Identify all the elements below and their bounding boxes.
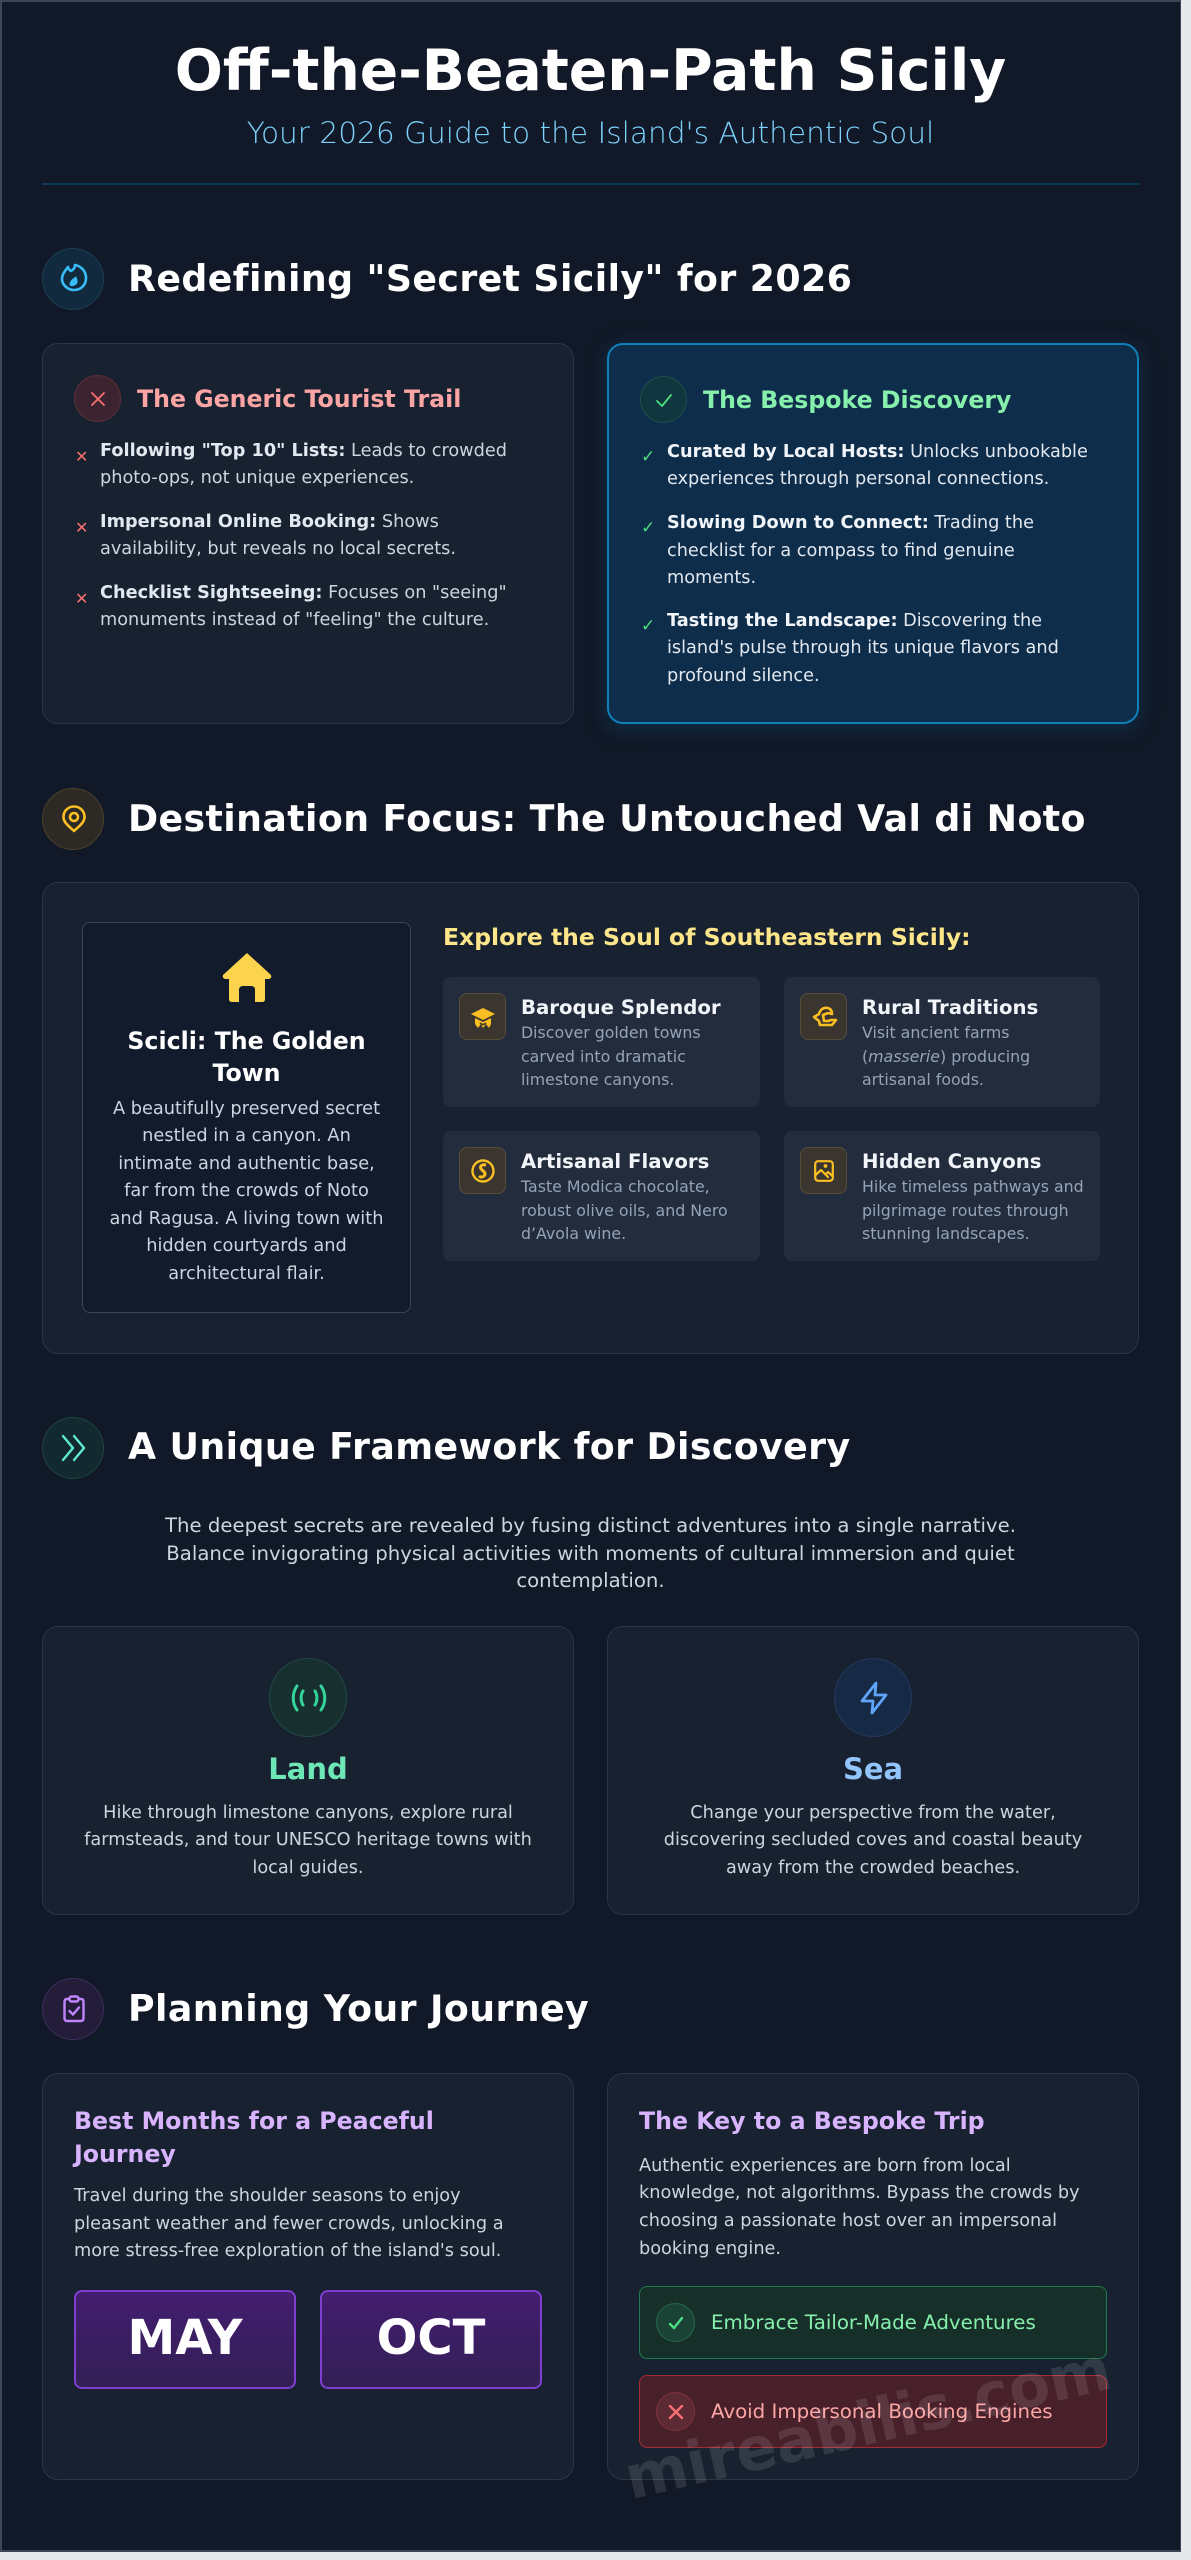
icon: flame section badge: [42, 248, 104, 310]
card text: Taste Modica chocolate,: [521, 1177, 710, 1196]
panel text: more stress-free exploration of the island's soul.: [74, 2241, 501, 2261]
panel: destination focus: [42, 882, 1139, 1354]
sea text: discovering secluded coves and coastal beauty: [664, 1830, 1082, 1850]
list item 3: ✕: [75, 588, 88, 608]
intro paragraph: [164, 1514, 1016, 1592]
list item 3: monuments instead of "feeling" the culture.: [100, 610, 489, 630]
sea title: Sea: [843, 1752, 903, 1786]
list item 2: moments.: [667, 568, 756, 588]
icon: cross: [656, 2392, 695, 2431]
callout text: Embrace Tailor-Made Adventures: [711, 2311, 1036, 2334]
subtitle: Your 2026 Guide to the Island's Authentic Soul: [247, 116, 934, 150]
list item 1: Following "Top 10" Lists: Leads to crowded: [100, 440, 507, 460]
list item 2: [641, 513, 1034, 588]
list item 1: [641, 442, 1088, 489]
watermark: mireabilis.com: [618, 2334, 1118, 2514]
list item 1: [75, 440, 507, 488]
icon: tool: [800, 993, 847, 1040]
list item 2: Impersonal Online Booking: Shows: [100, 512, 439, 532]
card text: [862, 1023, 1030, 1089]
card: hidden canyons: [784, 1131, 1100, 1261]
panel title: The Generic Tourist Trail: [137, 384, 461, 412]
icon: landscape picture: [800, 1147, 847, 1194]
land text: local guides.: [252, 1858, 364, 1878]
callout: embrace: [639, 2286, 1107, 2359]
sea text: Change your perspective from the water,: [690, 1802, 1056, 1822]
card: rural traditions: [784, 977, 1100, 1107]
list item 1: ✕: [75, 446, 88, 466]
panel text: [639, 2156, 1080, 2259]
panel: best months: [42, 2073, 574, 2480]
card text: [110, 1098, 383, 1284]
panel: bespoke discovery: [607, 343, 1139, 724]
list item 3: profound silence.: [667, 666, 820, 686]
panel title: The Bespoke Discovery: [703, 386, 1011, 414]
panel: key to a bespoke trip: [607, 2073, 1139, 2480]
callout text: Avoid Impersonal Booking Engines: [711, 2400, 1053, 2423]
sea text: away from the crowded beaches.: [726, 1858, 1020, 1878]
card text: d’Avola wine.: [521, 1224, 626, 1243]
card text: nestled in a canyon. An: [142, 1126, 351, 1146]
panel: land: [42, 1626, 574, 1915]
icon: clipboard section badge: [42, 1978, 104, 2040]
panel text: Travel during the shoulder seasons to enjoy: [74, 2186, 461, 2206]
month box: May: [74, 2290, 296, 2389]
card text: [521, 1023, 701, 1089]
icon: sea badge: [834, 1658, 912, 1737]
intro paragraph: Balance invigorating physical activities with moments of cultural immersion and quiet: [166, 1542, 1015, 1565]
card text: intimate and authentic base,: [118, 1154, 375, 1174]
land title: Land: [268, 1752, 348, 1786]
list item 3: [75, 582, 507, 630]
card text: and Ragusa. A living town with: [110, 1209, 383, 1229]
title: Off-the-Beaten-Path Sicily: [175, 38, 1006, 104]
icon: check badge: [640, 376, 687, 423]
month box: May: MAY: [127, 2310, 243, 2366]
subheading: Explore the Soul of Southeastern Sicily:: [443, 923, 971, 951]
icon: check: [656, 2303, 695, 2342]
heading: destination focus: Destination Focus: The Untouched Val di Noto: [128, 796, 1086, 840]
list item 3: ✓: [641, 616, 655, 636]
list item 2: availability, but reveals no local secrets.: [100, 539, 456, 559]
card title: Artisanal Flavors: [521, 1150, 709, 1173]
month box: October: OCT: [377, 2310, 485, 2366]
card text: far from the crowds of Noto: [124, 1181, 369, 1201]
card heading: [127, 1027, 366, 1087]
icon: land badge: [269, 1658, 347, 1737]
panel text: [74, 2186, 504, 2261]
card text: stunning landscapes.: [862, 1224, 1030, 1243]
icon: location pin section badge: [42, 788, 104, 850]
card text: artisanal foods.: [862, 1070, 984, 1089]
card: Scicli: [82, 922, 411, 1313]
card text: robust olive oils, and Nero: [521, 1201, 728, 1220]
panel text: choosing a passionate host over an impersonal: [639, 2211, 1057, 2231]
card text: A beautifully preserved secret: [113, 1098, 380, 1118]
heading: framework: A Unique Framework for Discovery: [128, 1424, 851, 1468]
card heading: Town: [212, 1059, 281, 1087]
card text: [520, 1177, 728, 1243]
panel text: booking engine.: [639, 2239, 781, 2259]
panel text: knowledge, not algorithms. Bypass the crowds by: [639, 2183, 1080, 2203]
card title: Hidden Canyons: [862, 1150, 1041, 1173]
icon: double chevron section badge: [42, 1417, 104, 1479]
card title: Rural Traditions: [862, 996, 1038, 1019]
land text: farmsteads, and tour UNESCO heritage towns with: [84, 1830, 532, 1850]
panel title: [72, 2106, 434, 2168]
heading: Redefining Secret Sicily: Redefining "Secret Sicily" for 2026: [128, 256, 852, 300]
sea text: [664, 1802, 1082, 1878]
list item 2: Slowing Down to Connect: Trading the: [667, 513, 1034, 533]
icon: cross badge: [74, 375, 121, 422]
panel title: Best Months for a Peaceful: [74, 2106, 434, 2134]
card text: Discover golden towns: [521, 1023, 701, 1042]
month box: October: [320, 2290, 542, 2389]
card text: hidden courtyards and: [146, 1236, 347, 1256]
list item 2: ✓: [641, 518, 655, 538]
card text: carved into dramatic: [521, 1047, 686, 1066]
icon: coin: [459, 1147, 506, 1194]
list item 1: ✓: [641, 446, 655, 466]
list item 1: photo-ops, not unique experiences.: [100, 468, 414, 488]
card text: limestone canyons.: [521, 1070, 674, 1089]
card text: Hike timeless pathways and: [862, 1177, 1084, 1196]
intro paragraph: contemplation.: [516, 1569, 665, 1592]
panel title: The Key to a Bespoke Trip: [639, 2106, 985, 2134]
land text: [84, 1802, 532, 1878]
panel text: pleasant weather and fewer crowds, unlocking a: [74, 2214, 504, 2234]
list item 3: [641, 610, 1059, 686]
panel: sea: [607, 1626, 1139, 1915]
card text: Visit ancient farms: [862, 1023, 1009, 1042]
card text: architectural flair.: [168, 1264, 325, 1284]
list item 1: experiences through personal connections.: [667, 469, 1049, 489]
heading: planning: Planning Your Journey: [128, 1986, 589, 2030]
list item 2: ✕: [75, 518, 88, 536]
list item 1: Curated by Local Hosts: Unlocks unbookable: [667, 442, 1088, 462]
panel title: Journey: [74, 2140, 176, 2168]
land text: Hike through limestone canyons, explore rural: [103, 1802, 513, 1822]
card text: pilgrimage routes through: [862, 1201, 1069, 1220]
card text: (masserie) producing: [862, 1047, 1030, 1066]
list item 3: island's pulse through its unique flavors and: [667, 638, 1059, 658]
callout: avoid: [639, 2375, 1107, 2448]
card heading: Scicli: The Golden: [127, 1027, 366, 1055]
icon: house: [222, 953, 272, 1002]
card title: Baroque Splendor: [521, 996, 721, 1019]
intro paragraph: The deepest secrets are revealed by fusing distinct adventures into a single narrative.: [165, 1514, 1016, 1537]
panel: generic tourist trail: [42, 343, 574, 724]
list item 3: Checklist Sightseeing: Focuses on "seeing": [100, 582, 507, 602]
icon: graduation cap: [459, 993, 506, 1040]
list item 3: Tasting the Landscape: Discovering the: [667, 610, 1042, 630]
card: artisanal flavors: [443, 1131, 760, 1261]
panel text: Authentic experiences are born from local: [639, 2156, 1011, 2176]
list item 2: checklist for a compass to find genuine: [667, 541, 1015, 561]
list item 2: [75, 512, 456, 559]
card text: [862, 1177, 1084, 1243]
card: baroque splendor: [443, 977, 760, 1107]
